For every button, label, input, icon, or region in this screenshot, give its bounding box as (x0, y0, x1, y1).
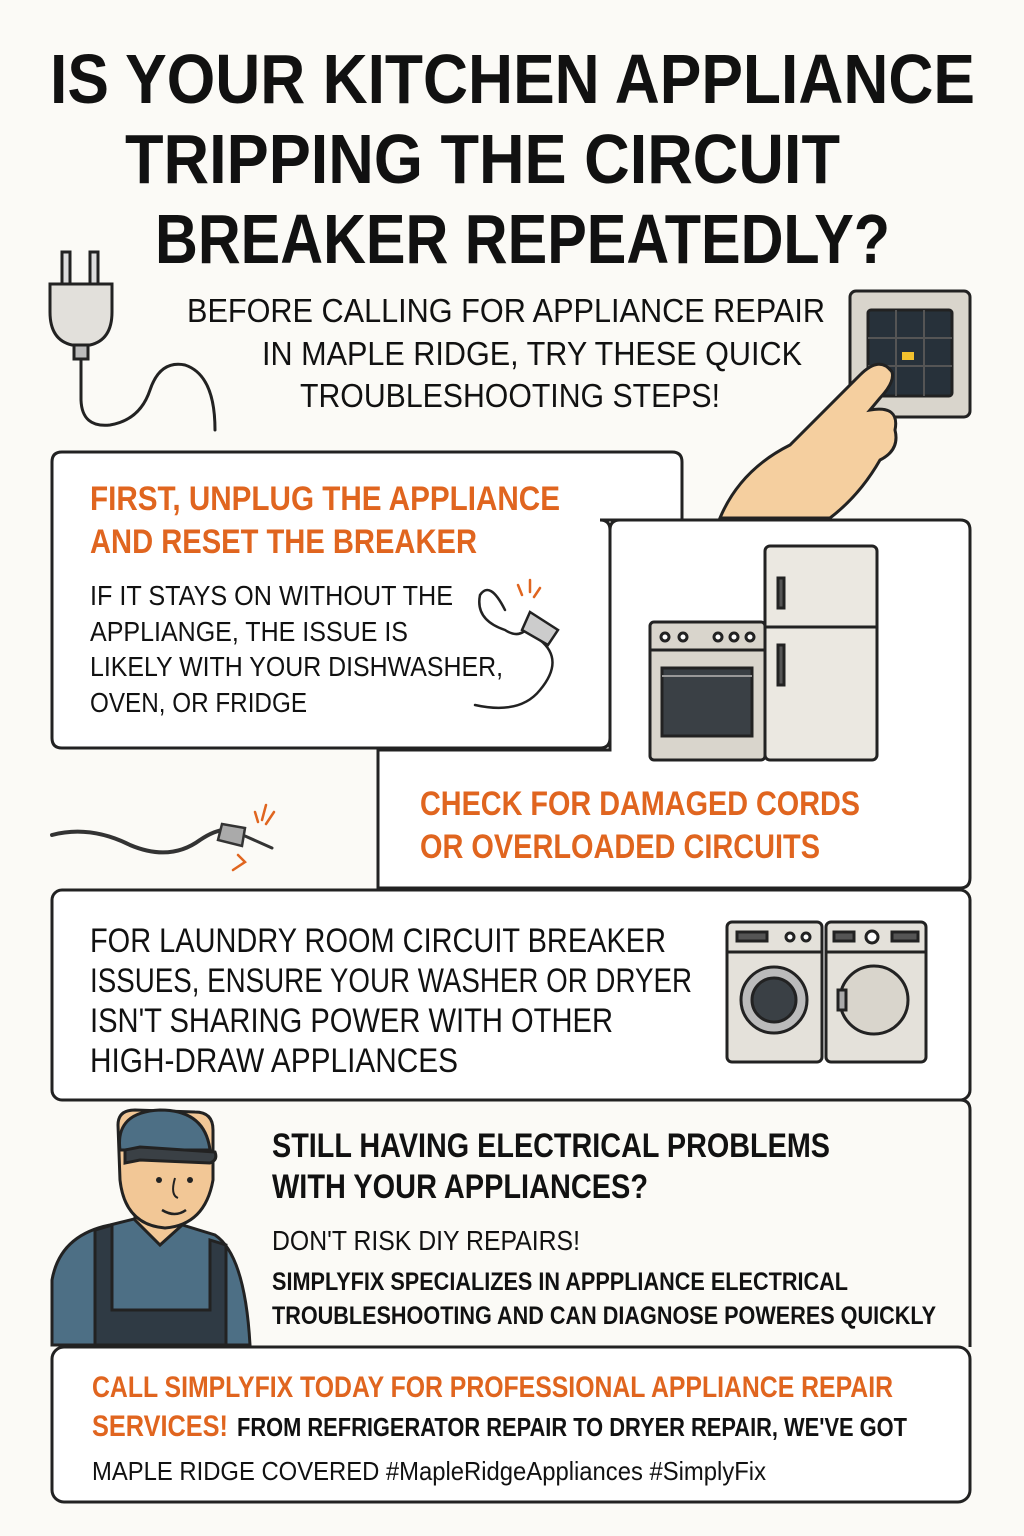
heading: still having problems: WITH YOUR APPLIANCES? (272, 1168, 648, 1206)
text: DIY warning: SIMPLYFIX SPECIALIZES IN APPPLIANCE ELECTRICAL (272, 1268, 848, 1296)
heading: step 2 (420, 785, 860, 866)
text: step 1 body: IF IT STAYS ON WITHOUT THE (90, 580, 453, 611)
icon: washer and dryer (727, 922, 926, 1062)
heading: step 1: AND RESET THE BREAKER (90, 523, 477, 561)
heading: still having problems (272, 1127, 830, 1206)
heading: step 1: FIRST, UNPLUG THE APPLIANCE (90, 480, 560, 518)
text: step 1 body: LIKELY WITH YOUR DISHWASHER, (90, 651, 503, 682)
icon: stove (650, 622, 765, 760)
title (50, 40, 975, 278)
text: call to action: FROM REFRIGERATOR REPAIR TO DRYER REPAIR, WE'VE GOT (237, 1412, 907, 1442)
text: DIY warning (272, 1225, 936, 1330)
text: laundry: ISN'T SHARING POWER WITH OTHER (90, 1002, 613, 1040)
heading: step 1 (90, 480, 560, 561)
text: call to action: MAPLE RIDGE COVERED #MapleRidgeAppliances #SimplyFix (92, 1456, 766, 1486)
panel: still having problems (52, 1100, 970, 1347)
text: laundry: ISSUES, ENSURE YOUR WASHER OR DRYER (90, 962, 692, 1000)
icon: breaker panel with hand (720, 291, 970, 518)
text: call to action (92, 1371, 907, 1486)
icon: plug (50, 252, 215, 430)
heading: step 2: CHECK FOR DAMAGED CORDS (420, 785, 860, 823)
icon: fridge (765, 546, 877, 760)
text: laundry: FOR LAUNDRY ROOM CIRCUIT BREAKER (90, 922, 666, 960)
panel: step 2 (378, 520, 970, 888)
title: BREAKER REPEATEDLY? (155, 200, 890, 278)
heading: step 2: OR OVERLOADED CIRCUITS (420, 828, 820, 866)
title: TRIPPING THE CIRCUIT (125, 120, 840, 198)
subtitle: IN MAPLE RIDGE, TRY THESE QUICK (262, 335, 802, 372)
text: step 1 body: APPLIANGE, THE ISSUE IS (90, 616, 408, 647)
text: step 1 body (90, 580, 503, 718)
text: call to action: SERVICES! (92, 1410, 228, 1443)
icon: small plug (475, 580, 558, 708)
text: laundry (90, 922, 692, 1080)
text: laundry: HIGH-DRAW APPLIANCES (90, 1042, 458, 1080)
icon: technician (52, 1110, 250, 1345)
icon: damaged cord (52, 805, 274, 870)
text: DIY warning: TROUBLESHOOTING AND CAN DIAGNOSE POWERES QUICKLY (272, 1302, 936, 1330)
text: step 1 body: OVEN, OR FRIDGE (90, 687, 307, 718)
heading: still having problems: STILL HAVING ELECTRICAL PROBLEMS (272, 1127, 830, 1165)
subtitle (187, 292, 825, 414)
panel: laundry (52, 890, 970, 1100)
subtitle: BEFORE CALLING FOR APPLIANCE REPAIR (187, 292, 825, 329)
subtitle: TROUBLESHOOTING STEPS! (300, 377, 720, 414)
text: DIY warning: DON'T RISK DIY REPAIRS! (272, 1225, 580, 1256)
panel: call to action (52, 1347, 970, 1502)
panel: step 1 (52, 452, 682, 748)
